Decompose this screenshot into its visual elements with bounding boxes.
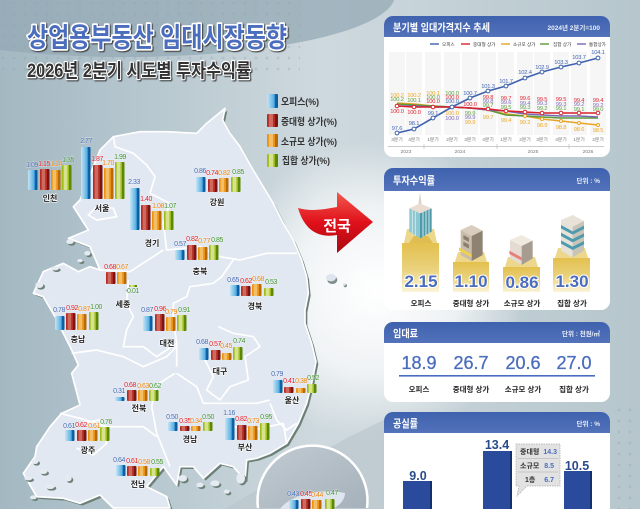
line chart: 98.8 [556, 125, 566, 131]
chart legend: 소규모 상가 [513, 41, 536, 48]
line chart: 100.0 [390, 109, 404, 115]
map legend [267, 94, 337, 167]
line chart: 100.0 [445, 99, 459, 105]
region: 전남: 0.55 [151, 459, 163, 466]
panel: 임대료: 20.6 [505, 353, 541, 373]
line chart: 100.0 [445, 111, 459, 117]
panel: 공실률 [384, 412, 610, 509]
region: 전북: 0.62 [149, 383, 161, 390]
line chart: 99.4 [593, 98, 604, 104]
panel: 임대료: 18.9 [401, 353, 437, 373]
line chart: 99.9 [465, 115, 475, 121]
line chart: 101.3 [481, 84, 495, 90]
map legend: 중대형 상가(%) [281, 116, 337, 128]
region: 충북 [174, 236, 223, 276]
region: 전남: 0.61 [126, 458, 138, 465]
arrow: 전국: 전국 [323, 218, 351, 235]
line chart: 100.0 [426, 99, 440, 105]
line chart: 2025 [528, 149, 539, 155]
panel: 공실률: 단위 : % [576, 419, 600, 428]
region: 인천: 1.15 [38, 161, 50, 168]
line chart: 104.1 [591, 50, 605, 56]
values: 2.15 [404, 272, 438, 291]
line chart: 99.6 [501, 100, 511, 106]
region: 대전: 0.96 [154, 306, 166, 313]
region: 경기: 1.07 [164, 203, 176, 210]
region: 대구 [196, 338, 245, 376]
panel: 임대료: 오피스 [409, 385, 429, 394]
bar chart: 13.4 [485, 438, 509, 452]
line chart: 103.3 [554, 60, 568, 66]
line chart: 99.1 [556, 106, 566, 112]
region: 충북: 0.77 [198, 238, 210, 245]
line chart: 102.9 [535, 65, 549, 71]
region: 전북: 전북 [132, 403, 147, 413]
region: 부산: 부산 [238, 442, 253, 452]
region: 광주: 0.61 [88, 423, 100, 430]
labels [411, 298, 587, 308]
values: 0.86 [505, 273, 539, 292]
line chart: 99.1 [428, 111, 438, 117]
panel: 임대료: 소규모 상가 [505, 384, 541, 394]
values [404, 272, 589, 292]
line chart: 1분기 [500, 136, 512, 143]
region: 경북: 0.62 [240, 278, 252, 285]
region: 경기: 1.08 [152, 203, 164, 210]
line chart: 98.9 [537, 123, 547, 129]
region: 충북: 0.82 [186, 236, 198, 243]
region: 경기: 경기 [145, 238, 159, 248]
line chart: 98.1 [409, 121, 419, 127]
region: 인천: 1.09 [26, 162, 38, 169]
region: 인천 [26, 157, 74, 203]
bar chart: 10.5 [565, 459, 589, 473]
line chart: 98.5 [593, 128, 603, 134]
values: 1.10 [454, 272, 488, 291]
region: 경기 [128, 179, 176, 248]
line chart: 99.9 [465, 111, 475, 117]
line chart: 2023 [401, 149, 412, 155]
line chart: 99.3 [520, 105, 530, 111]
chart legend: 통합상가 [589, 41, 607, 48]
line chart: 99.7 [483, 103, 493, 109]
icon: mid-size shop [459, 225, 483, 261]
region: 제주 inset: 0.44 [311, 492, 323, 499]
region: 대전 [141, 306, 190, 348]
line chart: 1분기 [427, 136, 439, 143]
labels: 중대형 상가 [453, 298, 489, 308]
panel: 투자수익률 [384, 168, 610, 310]
region: 세종: 세종 [116, 299, 131, 309]
region: 제주 inset: 0.45 [300, 491, 312, 498]
region: 충남: 0.87 [78, 306, 90, 313]
line chart: 100.0 [445, 91, 459, 97]
region: 광주: 광주 [81, 445, 96, 455]
region: 대전: 0.91 [178, 307, 190, 314]
icon: small shop [509, 235, 533, 265]
region: 경북 [227, 276, 277, 311]
panel: 임대료: 중대형 상가 [453, 384, 489, 394]
icons: buildings [409, 192, 584, 265]
arrow: 전국 [298, 192, 373, 253]
line chart: 98.6 [574, 127, 584, 133]
callout: 1층 [525, 475, 536, 484]
region: 세종: -0.01 [125, 288, 139, 295]
region: 강원 [194, 168, 244, 207]
region: 부산: 0.95 [260, 414, 272, 421]
region: 경북: 0.68 [252, 276, 264, 283]
line chart: 100.0 [463, 102, 477, 108]
labels: 오피스 [411, 299, 431, 308]
line chart: 100.0 [407, 110, 421, 116]
region: 경남: 0.34 [190, 418, 202, 425]
region: 전북: 0.31 [113, 388, 125, 395]
line chart: 100.0 [445, 116, 459, 122]
panel: 임대료: 임대료 [393, 327, 418, 340]
line chart: 99.2 [574, 102, 584, 108]
region: 전남: 0.58 [138, 459, 150, 466]
line chart: 99.5 [537, 97, 547, 103]
line chart: 4분기 [408, 136, 420, 143]
map legend: 집합 상가(%) [282, 155, 330, 167]
region: 충북: 충북 [193, 267, 208, 276]
region: 충남: 0.78 [53, 307, 65, 314]
region: 대구: 0.57 [209, 341, 221, 348]
region: 제주 inset: 0.47 [326, 490, 338, 497]
region: 서울: 서울 [95, 203, 110, 213]
region: 세종: 0.67 [116, 264, 128, 271]
region: 서울: 2.77 [80, 138, 92, 145]
region: 대전: 대전 [160, 338, 174, 348]
line chart: 100.1 [407, 98, 421, 104]
region: 세종: 0.68 [104, 264, 116, 271]
region: 광주: 0.61 [63, 423, 75, 430]
callout: 14.3 [543, 449, 557, 456]
region: 인천: 1.35 [62, 157, 74, 164]
line chart: 1분기 [573, 136, 585, 143]
region: 울산: 울산 [285, 395, 300, 405]
panel: 임대료: 단위 : 천원/㎡ [562, 329, 600, 338]
region: 충북: 0.57 [174, 241, 186, 248]
panel: 투자수익률: 투자수익률 [393, 175, 435, 187]
line chart: 99.2 [537, 106, 547, 112]
title: 상업용부동산 임대시장동향 [27, 23, 287, 53]
line chart: 100.2 [407, 93, 421, 99]
line chart: 103.7 [572, 55, 586, 61]
region: 울산: 0.79 [271, 371, 283, 378]
region: 서울 [80, 138, 126, 213]
callout: 8.5 [544, 463, 554, 470]
line chart: 99.5 [556, 97, 566, 103]
line chart: 4분기 [555, 136, 567, 143]
line chart: 99.2 [593, 103, 603, 109]
region: 충남: 1.00 [90, 304, 102, 311]
line chart: 100.2 [390, 97, 404, 103]
region: 경남 [166, 414, 214, 444]
line chart: 2024 [455, 149, 466, 155]
panel: 분기별 임대가격지수 추세 [384, 16, 610, 157]
region: 충남 [53, 304, 102, 344]
callout [516, 444, 560, 496]
region: 부산: 1.16 [223, 410, 235, 417]
region: 광주: 0.76 [100, 419, 112, 426]
bar chart: 9.0 [409, 469, 427, 483]
labels: 소규모 상가 [504, 298, 540, 308]
region: 전남: 전남 [131, 479, 146, 489]
region: 충북: 0.85 [211, 237, 223, 244]
map of South Korea [23, 108, 347, 509]
line chart: 100.0 [426, 95, 440, 101]
region: 광주: 0.62 [75, 422, 87, 429]
region: 경남: 0.50 [166, 414, 178, 421]
labels: 집합 상가 [557, 298, 587, 308]
line chart: 101.7 [499, 79, 513, 85]
line chart: 3분기 [464, 136, 476, 143]
region: 세종 [104, 264, 139, 309]
icon: Ulleungdo and Dokdo [326, 274, 347, 287]
region: 대전: 0.79 [165, 309, 177, 316]
region: 울산: 0.52 [307, 375, 319, 382]
line chart: 99.3 [537, 101, 547, 107]
line chart: 99.6 [520, 96, 530, 102]
line chart: 100.1 [426, 91, 440, 97]
callout: 소규모 [520, 462, 540, 470]
region: 경남: 0.50 [202, 414, 214, 421]
region: 인천: 1.14 [50, 161, 62, 168]
icon: apartment block [561, 215, 584, 257]
bar chart [403, 438, 592, 509]
line chart: 99.7 [483, 115, 493, 121]
region: 울산 [271, 371, 319, 405]
region: 경기: 2.33 [128, 179, 140, 186]
line chart: 2026 [583, 149, 594, 155]
region: 경북: 0.65 [227, 277, 239, 284]
chart legend: 중대형 상가 [473, 41, 496, 48]
line chart: 2분기 [592, 136, 604, 143]
region: 울산: 0.38 [295, 378, 307, 385]
region: 강원: 강원 [210, 197, 224, 207]
region: 대구: 0.68 [196, 339, 208, 346]
line chart: 2분기 [519, 136, 531, 143]
subtitle: 2026년 2분기 시도별 투자수익률 [27, 60, 251, 82]
plinths [402, 229, 590, 292]
panel: 분기별 임대가격지수 추세: 분기별 임대가격지수 추세 [393, 21, 490, 34]
region: 제주 inset: 0.43 [287, 491, 299, 498]
region: 경북: 0.53 [265, 279, 277, 286]
line chart: 99.4 [501, 118, 512, 124]
region: 대구: 대구 [213, 366, 228, 376]
line chart: 99.8 [483, 99, 493, 105]
region: 강원: 0.82 [218, 170, 230, 177]
region: 광주 [63, 419, 112, 455]
region: 서울: 1.99 [114, 154, 126, 161]
region: 전북: 0.63 [137, 383, 149, 390]
region: 서울: 1.87 [91, 156, 103, 163]
region: 부산 [223, 410, 272, 452]
region: 강원: 0.86 [194, 168, 206, 175]
callout: 중대형 [520, 447, 539, 456]
region: 전남 [113, 457, 163, 489]
region: 전북: 0.68 [124, 382, 136, 389]
region: 충남: 충남 [71, 334, 86, 344]
region: 부산: 0.82 [235, 416, 247, 423]
line chart: 2분기 [446, 136, 458, 143]
line chart: 102.4 [518, 70, 533, 76]
region: 경남: 경남 [183, 434, 198, 444]
line chart: 99.0 [593, 107, 603, 113]
panel: 임대료: 27.0 [556, 353, 592, 373]
map legend: 소규모 상가(%) [281, 136, 337, 148]
line chart: 99.1 [574, 107, 584, 113]
panel: 분기별 임대가격지수 추세: 2024년 2분기=100 [548, 23, 600, 32]
panel: 공실률: 공실률 [393, 417, 418, 430]
line chart: 99.4 [520, 101, 531, 107]
line chart: 100.7 [463, 91, 477, 97]
line chart: 99.7 [501, 96, 511, 102]
panel: 임대료 [384, 322, 610, 402]
region: 서울: 1.70 [102, 160, 114, 167]
values: 1.30 [555, 272, 589, 291]
panel: 임대료: 집합 상가 [559, 384, 589, 394]
region: 대구: 0.74 [233, 338, 245, 345]
line chart: 100.2 [390, 93, 404, 99]
line chart: 3분기 [391, 136, 403, 143]
region: 전북 [113, 382, 161, 413]
region: 대전: 0.87 [141, 307, 153, 314]
callout: 6.7 [544, 477, 554, 484]
line chart: 99.4 [574, 98, 585, 104]
line chart: 99.3 [556, 102, 566, 108]
region: 강원: 0.85 [232, 169, 244, 176]
line chart: 99.8 [483, 95, 493, 101]
line chart: 99.9 [465, 120, 475, 126]
region: 제주 inset [258, 446, 368, 509]
region: 경기: 1.40 [140, 196, 152, 203]
line chart [388, 50, 606, 155]
region: 대구: 0.45 [220, 343, 232, 350]
region: 강원: 0.74 [206, 170, 218, 177]
region: 전남: 0.64 [113, 457, 125, 464]
chart legend: 집합 상가 [553, 41, 572, 48]
line chart: 99.2 [520, 120, 530, 126]
region: 인천: 인천 [43, 193, 57, 203]
line chart: 4분기 [482, 136, 494, 143]
line chart: 97.6 [392, 126, 402, 132]
panel: 임대료: 26.7 [453, 353, 489, 373]
region: 충남: 0.92 [66, 305, 78, 312]
region: 울산: 0.41 [283, 378, 295, 385]
panel: 투자수익률: 단위 : % [576, 176, 600, 185]
line chart: 100.0 [445, 95, 459, 101]
map legend: 오피스(%) [281, 97, 319, 108]
chart legend: 오피스 [442, 41, 455, 48]
line chart: 3분기 [536, 136, 548, 143]
line chart: 99.5 [501, 105, 511, 111]
icon: office tower [409, 192, 432, 238]
region: 경남: 0.35 [179, 418, 191, 425]
chart legend [430, 41, 607, 48]
region: 경북: 경북 [248, 301, 263, 311]
region: 부산: 0.73 [247, 418, 259, 425]
